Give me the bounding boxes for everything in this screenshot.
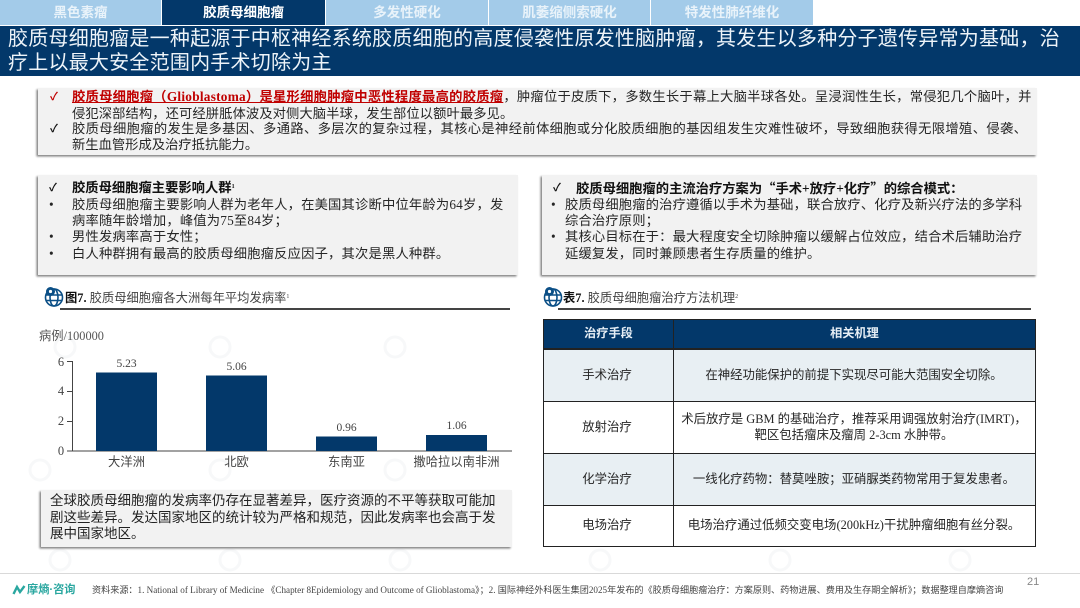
treatment bullets: • <box>551 229 556 244</box>
cell: radiotherapy mechanism <box>673 401 1036 454</box>
check mark red: ✓ <box>50 91 58 103</box>
cell: surgery mechanism: 在神经功能保护的前提下实现尽可能大范围安全切除。 <box>705 368 1003 382</box>
header cell: method <box>543 319 674 349</box>
population bullets: 白人种群拥有最高的胶质母细胞瘤反应因子，其次是黑人种群。 <box>72 246 449 261</box>
y axis labels: 6 <box>58 355 64 369</box>
y axis unit: 病例/100000 <box>39 328 104 343</box>
y axis labels: 4 <box>58 384 65 398</box>
title banner: 疗上以最大安全范围内手术切除为主 <box>8 52 332 74</box>
population bullets: • <box>49 229 54 244</box>
row: radiotherapy <box>543 402 1036 453</box>
axes <box>67 362 512 451</box>
category labels <box>108 454 500 469</box>
panel: treatment mode <box>542 175 1037 275</box>
treatment bullets <box>551 197 1022 261</box>
tab: melanoma <box>0 0 161 25</box>
tab: glioblastoma active: 胶质母细胞瘤 <box>203 5 284 20</box>
figure heading <box>44 287 510 310</box>
tab: ALS: 肌萎缩侧索硬化 <box>522 5 617 20</box>
tab: multiple sclerosis: 多发性硬化 <box>373 5 441 20</box>
tab: pulmonary fibrosis <box>651 0 813 25</box>
callout: global disparity: 全球胶质母细胞瘤的发病率仍存在显著差异，医疗资源的不平等获取可能加 <box>50 493 496 508</box>
cell: TTF: 电场治疗 <box>582 518 632 532</box>
population bullets <box>49 197 503 261</box>
tab: glioblastoma active <box>162 0 325 25</box>
value labels: 0.96 <box>336 422 357 434</box>
panel: affected population <box>38 175 518 275</box>
table title: 表7. 胶质母细胞瘤治疗方法机理2 <box>563 291 738 305</box>
population bullets: • <box>49 246 54 261</box>
icon: globe pin <box>44 287 64 307</box>
table heading <box>544 287 1031 310</box>
treatment bullets: 延缓复发，同时兼顾患者生存质量的维护。 <box>565 246 820 261</box>
cell: surgery mechanism <box>673 349 1036 402</box>
population bullets: 男性发病率高于女性； <box>72 229 207 244</box>
cell: chemotherapy <box>543 453 674 506</box>
category labels: 撒哈拉以南非洲 <box>413 454 500 469</box>
table header <box>543 319 1036 349</box>
tab: melanoma: 黑色素瘤 <box>54 5 108 20</box>
row: surgery <box>543 349 1036 401</box>
treatment bullets: 胶质母细胞瘤的治疗遵循以手术为基础，联合放疗、化疗及新兴疗法的多学科 <box>565 197 1022 212</box>
cell: surgery <box>543 349 674 402</box>
value labels: 5.06 <box>226 361 247 373</box>
callout: global disparity <box>41 490 512 547</box>
callout: global disparity: 剧这些差异。发达国家地区的统计较为严格和规范，因此发病率也会高于发 <box>50 510 496 524</box>
tab: pulmonary fibrosis: 特发性肺纤维化 <box>685 5 779 20</box>
bars <box>96 372 487 451</box>
cell: chemotherapy mechanism <box>673 453 1036 506</box>
cell: radiotherapy <box>543 401 674 454</box>
cell: radiotherapy mechanism: 靶区包括瘤床及瘤周 2-3cm 水肿带。 <box>755 428 953 442</box>
title banner <box>0 26 1080 76</box>
cell: chemotherapy mechanism: 一线化疗药物：替莫唑胺；亚硝脲类药物常用于复发患者。 <box>693 472 1015 486</box>
logo <box>12 583 75 596</box>
panel: definition <box>38 88 1037 155</box>
check mark: ✓ <box>50 123 58 135</box>
cell: surgery: 手术治疗 <box>582 368 632 382</box>
cell: radiotherapy mechanism: 术后放疗是 GBM 的基础治疗，推荐采用调强放射治疗(IMRT)， <box>681 412 1027 426</box>
value labels: 5.23 <box>116 358 137 370</box>
bar chart <box>39 328 512 469</box>
definition text second line: 侵犯深部结构，还可经胼胝体波及对侧大脑半球，发生部位以额叶最多见。 <box>72 106 513 121</box>
page number: 21 <box>1027 576 1039 588</box>
logo mark <box>12 584 26 594</box>
tab: multiple sclerosis <box>326 0 488 25</box>
row: chemotherapy <box>543 454 1036 505</box>
callout: global disparity: 展中国家地区。 <box>50 526 144 541</box>
table: treatment mechanisms <box>543 319 1036 547</box>
cell: TTF mechanism: 电场治疗通过低频交变电场(200kHz)干扰肿瘤细胞有丝分裂。 <box>688 518 1020 532</box>
icon: globe pin <box>544 287 562 307</box>
cell: chemotherapy: 化学治疗 <box>582 472 632 486</box>
population bullets: 病率随年龄增加，峰值为75至84岁； <box>72 213 288 228</box>
value labels: 1.06 <box>446 420 467 432</box>
definition text: 胶质母细胞瘤（Glioblastoma）是星形细胞肿瘤中恶性程度最高的胶质瘤，肿瘤位于皮质下，多数生长于幕上大脑半球各处。呈浸润性生长，常侵犯几个脑叶，并 <box>72 89 1032 104</box>
category labels: 北欧 <box>224 455 249 469</box>
row: tumor treating fields <box>543 506 1036 547</box>
treatment bullets: 综合治疗原则； <box>565 213 659 228</box>
panel: affected population: ✓ <box>49 182 57 194</box>
y axis labels <box>58 355 65 458</box>
y axis labels: 2 <box>58 414 64 428</box>
population bullets: 胶质母细胞瘤主要影响人群为老年人，在美国其诊断中位年龄为64岁，发 <box>72 197 503 212</box>
logo text: 摩熵·咨询 <box>27 584 75 596</box>
tab: ALS <box>489 0 650 25</box>
population heading: 胶质母细胞瘤主要影响人群1 <box>72 180 235 195</box>
header cell: method: 治疗手段 <box>584 326 633 340</box>
treatment heading: 胶质母细胞瘤的主流治疗方案为“手术+放疗+化疗”的综合模式： <box>576 178 963 197</box>
population bullets: • <box>49 197 54 212</box>
category labels: 大洋洲 <box>108 454 145 469</box>
panel: treatment mode: ✓ <box>553 182 561 194</box>
header cell: mechanism <box>673 319 1036 349</box>
treatment bullets: • <box>551 197 556 212</box>
cell: TTF <box>543 505 674 547</box>
title banner: 胶质母细胞瘤是一种起源于中枢神经系统胶质细胞的高度侵袭性原发性脑肿瘤，其发生以多种分子遗传异常为基础，治 <box>8 28 1060 50</box>
navigation tabs <box>0 0 813 25</box>
source note: 资料来源：1. National of Library of Medicine 《Chapter 8Epidemiology and Outcome of Glioblastoma》；2. 国际神经外科医生集团2025年发布的《胶质母细胞瘤治疗：方案原则、药物进展、费用及生存期全解析》；数据整理自摩熵咨询 <box>92 585 1003 595</box>
figure title: 图7. 胶质母细胞瘤各大洲每年平均发病率1 <box>65 291 289 305</box>
category labels: 东南亚 <box>328 454 365 469</box>
cell: TTF mechanism <box>673 505 1036 547</box>
treatment bullets: 其核心目标在于：最大程度安全切除肿瘤以缓解占位效应，结合术后辅助治疗 <box>565 229 1022 244</box>
pathogenesis text second line: 新生血管形成及治疗抵抗能力。 <box>72 137 258 152</box>
y axis labels: 0 <box>58 444 64 458</box>
value labels <box>116 358 467 434</box>
pathogenesis text: 胶质母细胞瘤的发生是多基因、多通路、多层次的复杂过程，其核心是神经前体细胞或分化胶质细胞的基因组发生灾难性破坏，导致细胞获得无限增殖、侵袭、 <box>72 121 1027 136</box>
cell: radiotherapy: 放射治疗 <box>582 420 632 434</box>
header cell: mechanism: 相关机理 <box>830 326 879 340</box>
